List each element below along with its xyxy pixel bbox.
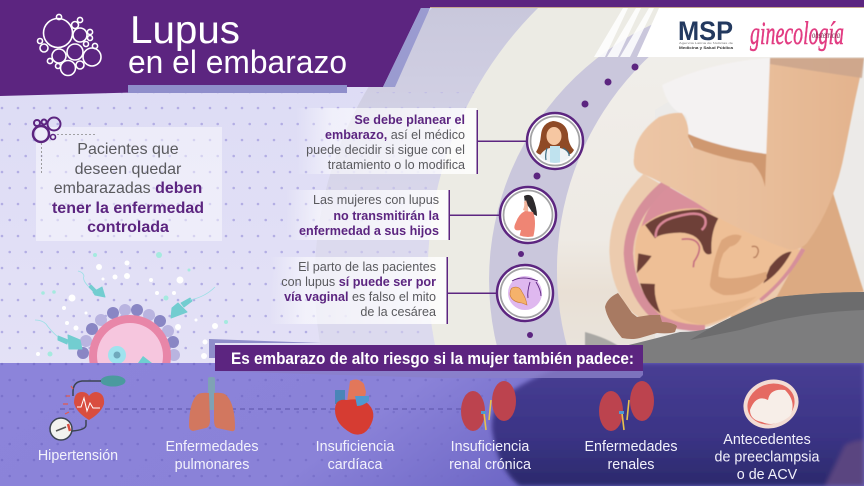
icon: embryo and preeclampsia — [715, 372, 819, 483]
label: pulmonares — [175, 457, 249, 473]
text block 1: plan pregnancy: Se debe planear el — [354, 113, 465, 127]
icon: hypertension — [38, 376, 126, 464]
header: purple title band — [0, 0, 864, 96]
text block 1: plan pregnancy — [296, 108, 477, 174]
fetus lower shade — [670, 297, 757, 325]
corona cells — [77, 304, 180, 361]
text block 3: vaginal delivery: El parto de las pacientes — [298, 260, 436, 274]
label: Enfermedades — [584, 439, 678, 455]
waist band under top — [686, 133, 767, 192]
icon: heart — [316, 380, 394, 473]
label — [316, 439, 394, 473]
icon: kidneys (renal failure) — [449, 381, 531, 473]
sperm — [58, 285, 192, 349]
belly cross-section — [609, 174, 803, 330]
logo: MSP: MSP — [678, 16, 733, 46]
top — [662, 58, 770, 156]
text block 2: no transmission: enfermedad a sus hijos — [299, 224, 439, 238]
sparkles — [36, 260, 218, 359]
arm — [634, 58, 864, 250]
text block 1: plan pregnancy: tratamiento o lo modifica — [328, 158, 465, 172]
label: renal crónica — [449, 457, 531, 473]
fetus — [635, 188, 800, 325]
callout text: controlada — [87, 219, 169, 236]
connectors and timeline dots — [446, 64, 638, 338]
bottom band: periwinkle with dark pillow — [0, 363, 864, 486]
label: Insuficiencia — [451, 439, 529, 455]
label: cardíaca — [328, 457, 382, 473]
text block 2: no transmission — [286, 190, 449, 240]
photo: lower hand — [605, 293, 677, 339]
text block 1: plan pregnancy: embarazo, así el médico — [325, 128, 465, 142]
photo: grey trousers — [620, 292, 864, 363]
back and torso — [730, 150, 864, 320]
title — [128, 9, 347, 80]
uterus wall — [628, 183, 705, 327]
icon: fetus in womb — [497, 265, 553, 321]
fetus arm — [710, 235, 767, 295]
logo: MSP: Agencia Latina de Noticias de — [679, 41, 733, 45]
text block 2: no transmission: Las mujeres con lupus — [313, 193, 439, 207]
text block 3: vaginal delivery: vía vaginal es falso el mito — [284, 290, 436, 304]
text block 3: vaginal delivery — [270, 257, 447, 324]
placenta — [656, 214, 706, 237]
label — [166, 439, 258, 473]
callout panel: controlled disease — [33, 118, 222, 241]
left leg — [585, 332, 646, 363]
shoulder shadow — [770, 58, 864, 78]
icon: lungs — [166, 377, 258, 473]
label — [449, 439, 531, 473]
belly skin — [609, 174, 803, 330]
umbilical cord — [682, 239, 699, 267]
icon: doctor — [527, 113, 583, 169]
label: de preeclampsia — [715, 450, 819, 466]
banner: high risk heading — [209, 339, 643, 378]
icon: kidneys (renal disease) — [584, 381, 678, 473]
logo panel with stripes — [594, 8, 864, 57]
title: Lupus — [130, 9, 240, 52]
dashed line — [60, 408, 470, 410]
callout text: deseen quedar — [75, 161, 182, 178]
amniotic dark regions — [645, 209, 718, 254]
label — [715, 432, 819, 483]
logo: bubbles — [38, 14, 101, 75]
banner: high risk heading: Es embarazo de alto riesgo si la mujer también padece: — [231, 350, 634, 368]
icon: small bubbles — [33, 118, 96, 173]
icon: pregnant woman — [500, 187, 556, 243]
callout text: embarazadas deben — [54, 180, 202, 197]
text block 2: no transmission: no transmitirán la — [333, 209, 440, 223]
ear — [752, 246, 758, 257]
title: en el embarazo — [128, 44, 347, 80]
label: Insuficiencia — [316, 439, 394, 455]
illustration: egg and sperm — [35, 252, 228, 363]
background arcs behind the photo — [315, 8, 864, 363]
photo: pregnant woman with belly cross-section — [585, 58, 864, 363]
callout text — [52, 141, 204, 236]
label: Enfermedades — [166, 439, 258, 455]
label — [584, 439, 678, 473]
text block 1: plan pregnancy: puede decidir si sigue con el — [306, 143, 465, 157]
label: Antecedentes — [723, 432, 811, 448]
label: o de ACV — [737, 467, 798, 483]
text block 3: vaginal delivery: con lupus sí puede ser por — [281, 275, 436, 289]
upper wall — [642, 187, 718, 227]
text block 3: vaginal delivery: de la cesárea — [360, 305, 436, 319]
logo: ginecologia: obstetricia — [812, 30, 840, 40]
logo: MSP: Medicina y Salud Pública — [679, 46, 733, 50]
label: Hipertensión — [38, 448, 118, 464]
label: renales — [608, 457, 654, 473]
callout text: tener la enfermedad — [52, 200, 204, 217]
callout text: Pacientes que — [77, 141, 179, 158]
